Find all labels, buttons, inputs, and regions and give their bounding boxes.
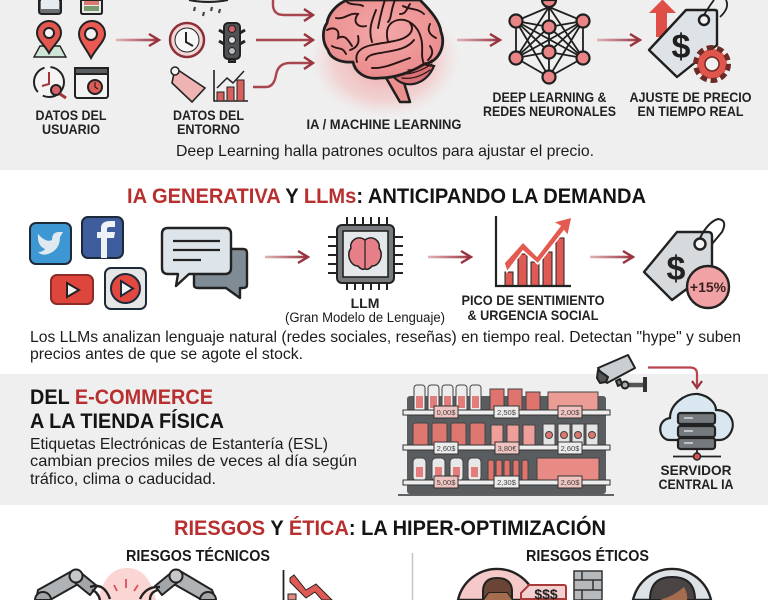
- chart: sentiment spike: [496, 216, 572, 286]
- icon: neural network: [510, 0, 590, 84]
- icon: price tag plus 15 percent: [644, 219, 729, 308]
- illustration: store shelf with ESL tags: 5,00$: [437, 478, 456, 487]
- arrow: network to price: [597, 34, 640, 46]
- illustration: woman portrait: [633, 569, 711, 600]
- column: ethical risks: [458, 548, 711, 600]
- illustration: store shelf with ESL tags: 2,60$: [437, 444, 456, 453]
- chart: falling line: [284, 570, 332, 600]
- label: sentiment spike: [462, 292, 605, 323]
- illustration: brick wall: [574, 571, 602, 600]
- arrow: camera to server: [648, 368, 702, 388]
- label: sentiment spike: PICO DE SENTIMIENTO: [462, 292, 605, 308]
- text: electronic labels: tráfico, clima o caducidad.: [30, 471, 216, 488]
- divider: [412, 553, 414, 600]
- products: middle row: [413, 423, 598, 447]
- label: central server: [658, 462, 734, 492]
- label: deep learning: [483, 89, 616, 119]
- illustration: colliding robot arms: [35, 568, 216, 600]
- label: deep learning: REDES NEURONALES: [483, 103, 616, 119]
- icon: price tag plus 15 percent: $: [667, 250, 686, 288]
- illustration: store shelf with ESL tags: 2,60$: [561, 444, 580, 453]
- icons: social networks: [30, 217, 146, 309]
- illustration: man with price tag: [458, 569, 566, 600]
- text: electronic labels: cambian precios miles de veces al día según: [30, 453, 357, 470]
- label: user data: USUARIO: [42, 121, 100, 137]
- illustration: store shelf with ESL tags: 2,30$: [497, 478, 517, 487]
- panel: e-commerce to physical store: [30, 355, 734, 495]
- label: price adjustment: AJUSTE DE PRECIO: [630, 89, 752, 105]
- illustration: store shelf with ESL tags: [398, 385, 614, 495]
- panel: AI pricing pipeline: [34, 0, 752, 160]
- icons: context data: [170, 0, 248, 102]
- illustration: store shelf with ESL tags: 2,60$: [561, 478, 580, 487]
- heading: generative AI: IA GENERATIVA Y LLMs: ANTICIPANDO LA DEMANDA: [127, 185, 646, 208]
- icon: chat bubbles: [162, 228, 247, 298]
- icon: price tag plus 15 percent: +15%: [690, 279, 727, 295]
- heading: risks: RIESGOS Y ÉTICA: LA HIPER-OPTIMIZACIÓN: [174, 516, 606, 540]
- arrows: context to brain: [253, 0, 313, 87]
- price tags: [434, 406, 582, 488]
- label: LLM: (Gran Modelo de Lenguaje): [285, 310, 445, 325]
- panel: generative AI and LLMs: [30, 185, 741, 363]
- heading: physical store: DEL E-COMMERCE: [30, 386, 213, 409]
- products: bottom row: [413, 458, 599, 481]
- icon: cloud server: [660, 394, 733, 460]
- label: LLM: [285, 295, 445, 325]
- icons: user data: [34, 0, 108, 98]
- column: technical risks: [35, 548, 332, 600]
- illustration: store shelf with ESL tags: 2,50$: [497, 408, 517, 417]
- heading: physical store: [30, 386, 224, 433]
- arrow: sentiment to tag: [590, 251, 633, 263]
- panel: risks and ethics: [35, 516, 711, 600]
- arrow: chat to LLM: [265, 251, 308, 263]
- label: LLM: LLM: [351, 295, 379, 311]
- label: price adjustment: [630, 89, 752, 119]
- label: central server: CENTRAL IA: [658, 476, 734, 492]
- caption: deep learning: Deep Learning halla patrones ocultos para ajustar el precio.: [176, 143, 594, 160]
- label: context data: DATOS DEL: [173, 107, 244, 123]
- arrow: LLM to sentiment: [428, 251, 471, 263]
- label: user data: [36, 107, 107, 137]
- label: price adjustment: EN TIEMPO REAL: [638, 103, 744, 119]
- text: LLM explanation: precios antes de que se agote el stock.: [30, 346, 303, 363]
- text: LLM explanation: Los LLMs analizan lenguaje natural (redes sociales, reseñas) en tiempo real. Detectan "hype" y suben: [30, 329, 741, 346]
- illustration: store shelf with ESL tags: 2,00$: [561, 408, 580, 417]
- arrow: brain to network: [457, 34, 500, 46]
- text: electronic labels: Etiquetas Electrónicas de Estantería (ESL): [30, 436, 328, 453]
- label: user data: DATOS DEL: [36, 107, 107, 123]
- text: LLM explanation: [30, 329, 741, 363]
- arrow: user to context: [116, 34, 159, 46]
- icon: price tag with gear: $: [672, 28, 691, 66]
- label: context data: [173, 107, 244, 137]
- heading: physical store: A LA TIENDA FÍSICA: [30, 410, 224, 433]
- subheading: ethical risks: RIESGOS ÉTICOS: [526, 548, 649, 565]
- products: top row: [414, 385, 598, 412]
- icon: brain: [310, 0, 460, 118]
- illustration: store shelf with ESL tags: 0,00$: [437, 408, 456, 417]
- illustration: store shelf with ESL tags: 3,80€: [498, 444, 517, 453]
- subheading: technical risks: RIESGOS TÉCNICOS: [126, 548, 270, 565]
- label: context data: ENTORNO: [177, 121, 240, 137]
- label: deep learning: DEEP LEARNING &: [492, 89, 606, 105]
- label: central server: SERVIDOR: [660, 462, 732, 478]
- label: sentiment spike: & URGENCIA SOCIAL: [468, 307, 599, 323]
- icon: security camera: [597, 355, 645, 392]
- icon: LLM chip: [328, 217, 403, 290]
- text: electronic labels: [30, 436, 357, 488]
- icon: price tag with gear: [649, 0, 727, 79]
- shelf boards: [403, 410, 610, 485]
- label: machine learning: IA / MACHINE LEARNING: [306, 116, 462, 132]
